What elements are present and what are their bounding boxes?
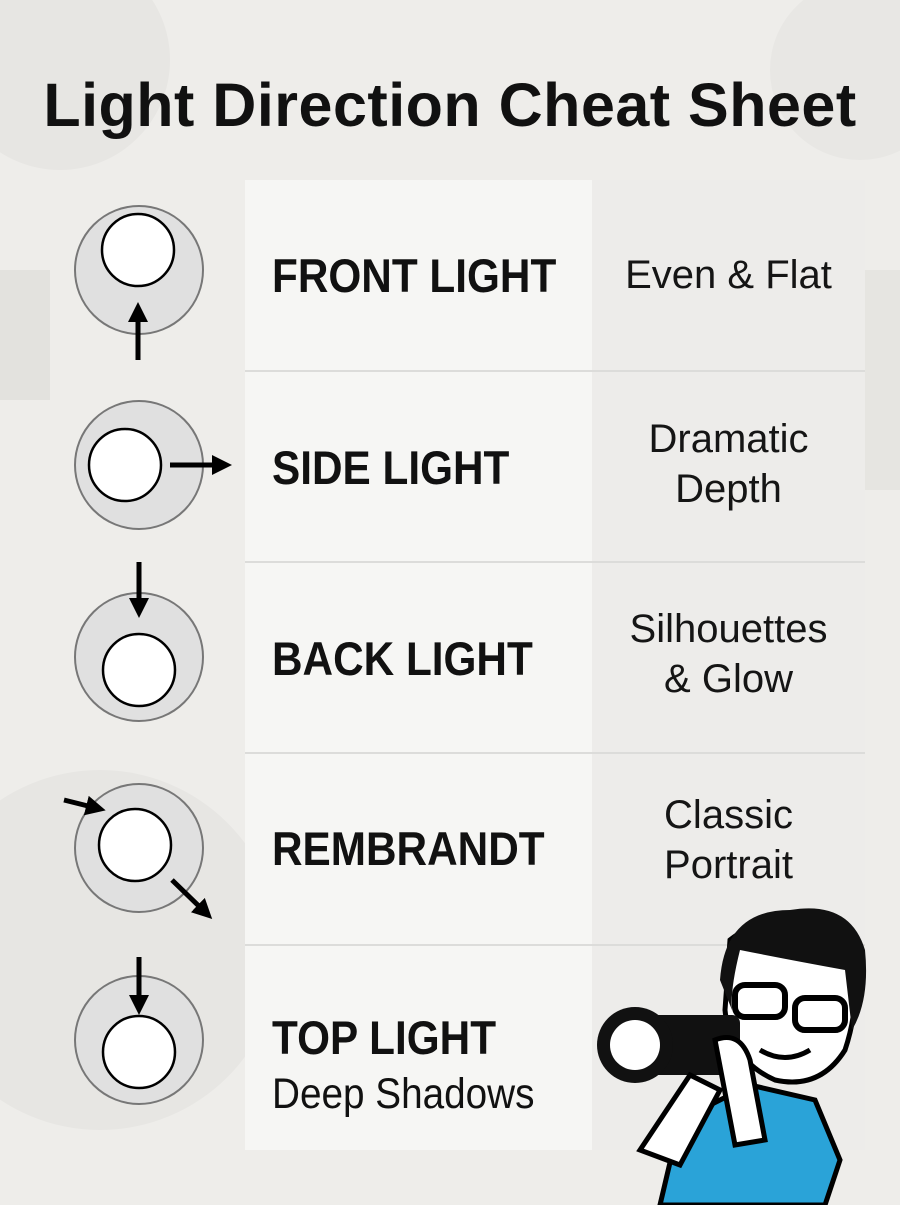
label: back light: BACK LIGHT bbox=[272, 632, 533, 685]
desc: back: & Glow bbox=[664, 657, 793, 701]
desc: back: Silhouettes bbox=[630, 607, 827, 651]
icon: rembrandt bbox=[64, 784, 205, 912]
label: top light: Deep Shadows bbox=[272, 1070, 534, 1118]
icon: back light bbox=[75, 562, 203, 721]
title: Light Direction Cheat Sheet bbox=[43, 71, 857, 139]
icon: top light bbox=[75, 957, 203, 1104]
desc: rembrandt: Classic bbox=[664, 793, 793, 837]
desc: side bbox=[648, 417, 809, 511]
desc: side: Dramatic bbox=[648, 417, 809, 461]
icon: front light bbox=[75, 206, 203, 360]
label: top light: TOP LIGHT bbox=[272, 1011, 496, 1064]
desc: back bbox=[630, 607, 827, 701]
label: front light: FRONT LIGHT bbox=[272, 249, 556, 302]
desc: front: Even & Flat bbox=[625, 253, 832, 297]
label: rembrandt: REMBRANDT bbox=[272, 822, 545, 875]
desc: rembrandt: Portrait bbox=[664, 843, 793, 887]
icon: side light bbox=[75, 401, 222, 529]
table panel bbox=[245, 180, 865, 1150]
desc: side: Depth bbox=[675, 467, 782, 511]
desc: rembrandt bbox=[664, 793, 793, 887]
cartoon photographer bbox=[597, 908, 866, 1205]
label: top light bbox=[272, 1011, 534, 1118]
label: side light: SIDE LIGHT bbox=[272, 441, 509, 494]
